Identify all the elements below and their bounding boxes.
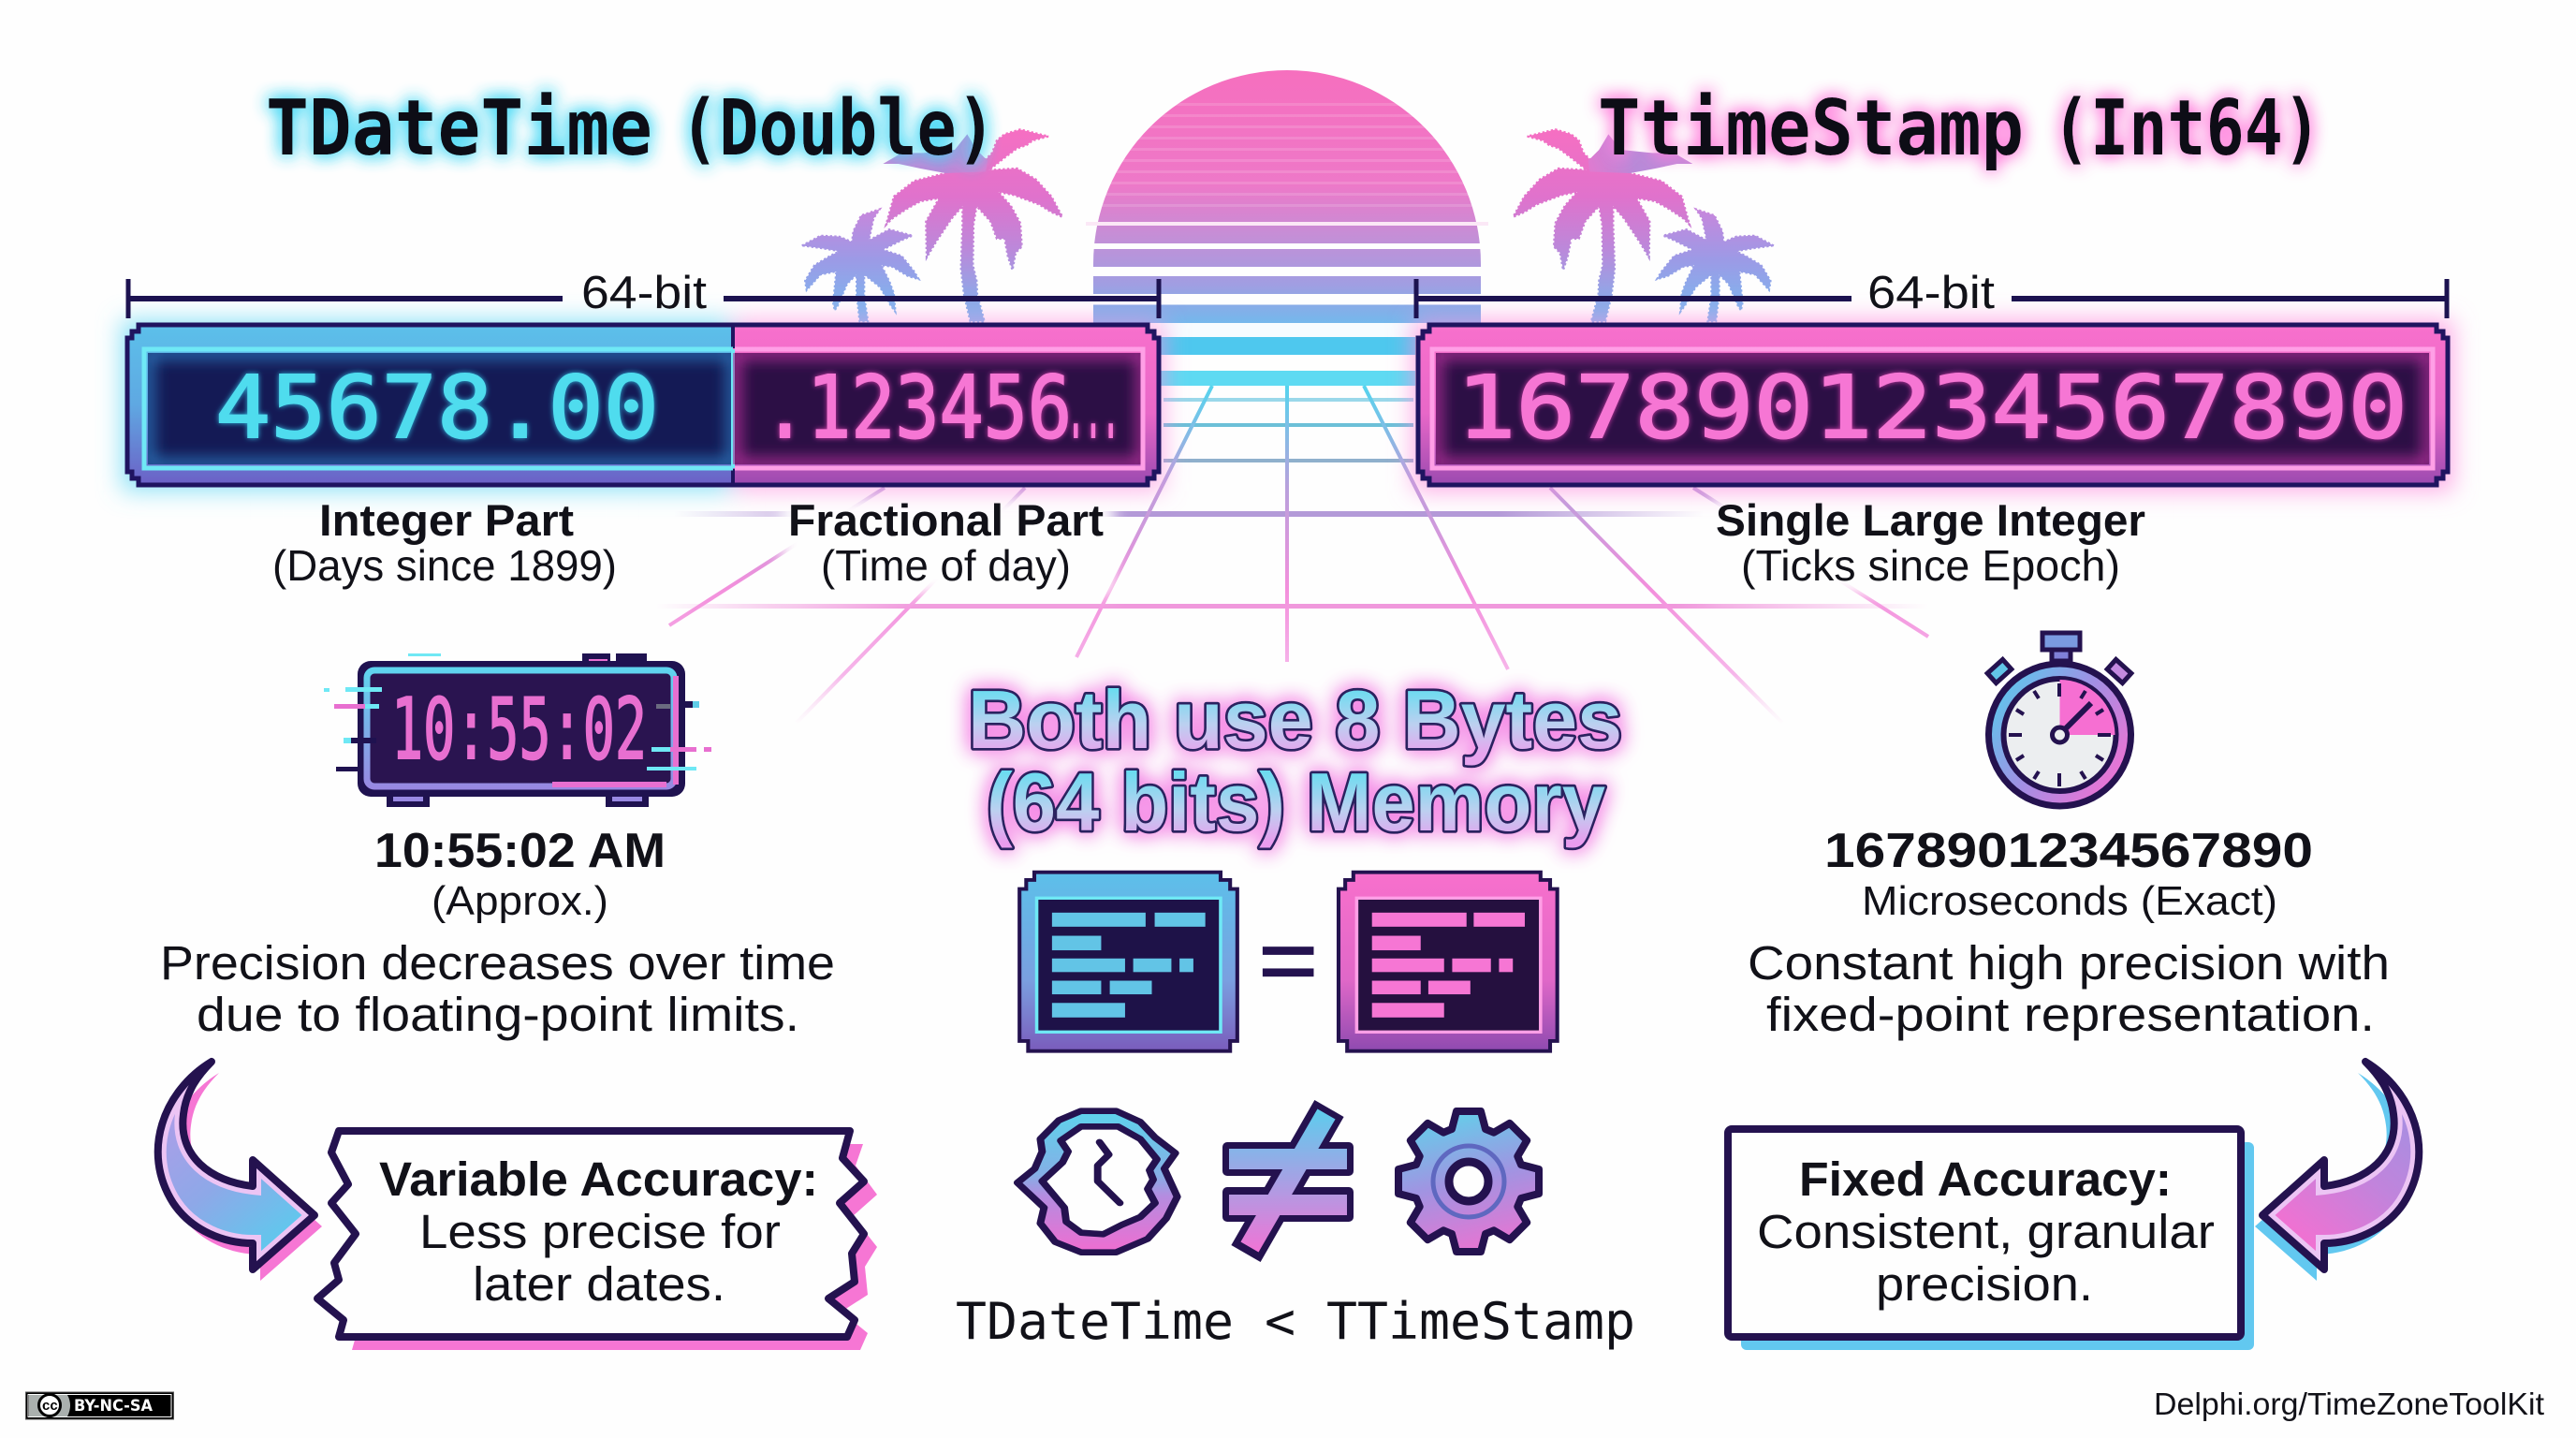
badge: creative commons: BY-NC-SA — [74, 1397, 154, 1416]
arrow: left curved — [158, 1062, 322, 1281]
icon: not equal sign — [1222, 1108, 1354, 1254]
badge: creative commons — [26, 1392, 174, 1419]
title: TtimeStamp (Int64): (Int64) — [2052, 84, 2321, 173]
ruler: left 64-bit — [128, 268, 1159, 318]
heading: both use 8 bytes: (64 bits) Memory — [987, 756, 1605, 848]
panel: TDateTime double bar — [127, 325, 1159, 486]
callout text: Variable Accuracy: — [379, 1152, 818, 1206]
icon: blue memory chip — [1019, 873, 1237, 1051]
icon: warped clock — [1017, 1111, 1178, 1253]
ruler: left 64-bit: 64-bit — [581, 268, 707, 318]
callout text — [379, 1152, 818, 1311]
text: right precision description — [1748, 936, 2390, 1041]
text: right precision description: fixed-point representation. — [1766, 988, 2375, 1041]
label: single large integer: Single Large Integer — [1716, 495, 2145, 545]
title: TtimeStamp (Int64): TtimeStamp — [1598, 84, 2024, 173]
icon: equals sign — [1263, 946, 1313, 976]
callout text: precision. — [1876, 1257, 2093, 1311]
icon: gear — [1398, 1111, 1539, 1252]
palm: right small — [1657, 209, 1774, 321]
panel: TDateTime double bar: ... — [1067, 358, 1120, 458]
white halos behind labels — [267, 496, 2158, 594]
title: TtimeStamp (Int64) — [1598, 84, 2321, 173]
callout: fixed accuracy — [1728, 1129, 2254, 1350]
label: single large integer — [1716, 495, 2145, 590]
text: TDateTime < TTimeStamp: TDateTime < TTimeStamp — [956, 1291, 1635, 1351]
panel: TTimeStamp int64 bar — [1418, 325, 2448, 485]
text: right precision description: Constant high precision with — [1748, 936, 2390, 990]
value: 45678.00: 45678.00 — [215, 358, 659, 458]
icon: pink memory chip — [1339, 873, 1558, 1051]
label: fractional part — [788, 495, 1104, 590]
title: TDateTime (Double): (Double) — [680, 84, 996, 173]
text: left precision description — [160, 936, 835, 1041]
callout text: Consistent, granular — [1757, 1205, 2215, 1258]
icon: stopwatch — [1987, 633, 2131, 806]
text: left precision description: Precision decreases over time — [160, 936, 835, 990]
palm: left small — [802, 209, 919, 321]
badge: creative commons: cc — [42, 1398, 58, 1414]
title: TDateTime (Double): TDateTime — [266, 84, 652, 173]
label: fractional part: Fractional Part — [788, 495, 1104, 545]
callout text: Fixed Accuracy: — [1799, 1152, 2172, 1206]
sun — [1086, 70, 1488, 386]
label: integer part: (Days since 1899) — [272, 541, 617, 590]
palm: left large — [883, 129, 1062, 321]
clock digits: 10:55:02 — [391, 681, 647, 779]
value: 1678901234567890: 1678901234567890 — [1456, 358, 2408, 458]
callout text: later dates. — [473, 1257, 725, 1311]
callout text: Less precise for — [419, 1205, 781, 1258]
text: microseconds exact: Microseconds (Exact) — [1862, 878, 2277, 924]
label: fractional part: (Time of day) — [821, 541, 1071, 590]
bar glow halos — [122, 320, 2452, 491]
inner panel: integer part — [144, 349, 735, 468]
inner panel: fractional part — [735, 349, 1143, 468]
text: approx: (Approx.) — [432, 878, 608, 924]
footer link text: Delphi.org/TimeZoneToolKit — [2154, 1387, 2544, 1421]
perspective grid — [655, 386, 1928, 723]
heading: both use 8 bytes — [968, 673, 1622, 848]
icon: glitch alarm clock — [324, 653, 711, 807]
palm: right large — [1514, 129, 1692, 321]
label: single large integer: (Ticks since Epoch) — [1741, 541, 2120, 590]
text: 10:55:02 AM: 10:55:02 AM — [374, 824, 666, 878]
arrow: right curved — [2255, 1062, 2419, 1281]
heading: both use 8 bytes: Both use 8 Bytes — [968, 673, 1622, 766]
ruler: right 64-bit: 64-bit — [1867, 268, 1995, 318]
text: microseconds value: 1678901234567890 — [1824, 824, 2313, 878]
callout text — [1757, 1152, 2215, 1311]
value: .123456...: .123456 — [763, 358, 1072, 458]
label: integer part — [272, 495, 617, 590]
text: left precision description: due to floating-point limits. — [197, 988, 799, 1041]
title: TDateTime (Double) — [266, 84, 996, 173]
label: integer part: Integer Part — [319, 495, 574, 545]
callout: variable accuracy — [317, 1131, 877, 1350]
ruler: right 64-bit — [1416, 268, 2447, 318]
